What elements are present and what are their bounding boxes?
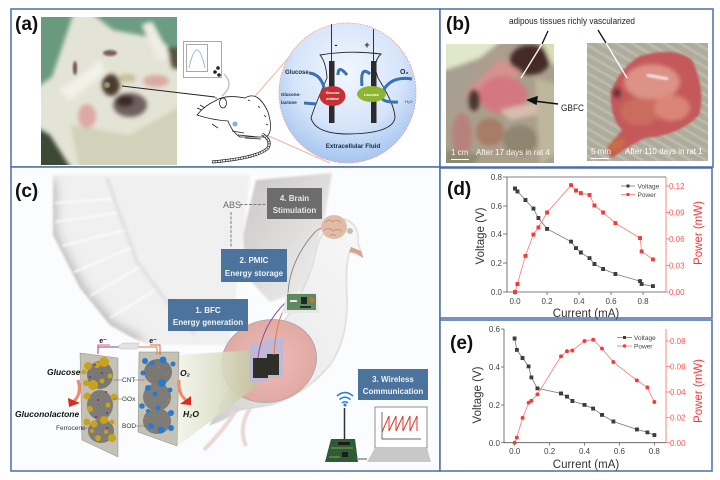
electrode callouts: Ferrocene — [56, 425, 86, 432]
label: glucose: Glucose — [47, 367, 81, 377]
label: 1 BFC: 1. BFC — [195, 306, 221, 315]
annotation: GBFC: GBFC — [561, 103, 584, 113]
chart: d: 0.0 — [491, 288, 503, 297]
pigeon eye — [347, 228, 353, 234]
chart: d: 0.8 — [637, 297, 649, 306]
arrow: GBFC — [528, 97, 558, 104]
icon: wifi router — [325, 392, 358, 462]
legend: Voltage — [638, 184, 660, 190]
GOx clusters — [82, 357, 118, 442]
chart: e: 0.0 — [489, 439, 501, 448]
chart: d: 0.4 — [573, 297, 585, 306]
diagram: extracellular fluid cell: Extracellular Fluid — [326, 143, 380, 150]
diagram: extracellular fluid cell: + — [364, 40, 370, 50]
icon: laptop with sawtooth signal — [358, 407, 431, 462]
axis titles: Voltage (V) — [472, 366, 484, 423]
flask outline — [311, 52, 395, 134]
chart: e: Power (mW) — [693, 359, 705, 423]
label: 4 brain stimulation — [267, 188, 322, 219]
chart: e: 0.0 — [509, 447, 521, 456]
pink implant pocket — [212, 309, 326, 413]
chart: d: 0.00 — [669, 288, 685, 297]
chart: e: 0.8 — [649, 447, 660, 456]
electron wires and connector box — [98, 343, 160, 355]
chart: e: 0.04 — [670, 388, 686, 397]
chart: e — [472, 325, 705, 471]
icon: oscilloscope — [184, 42, 229, 96]
BOD clusters — [139, 356, 176, 434]
chart: d: 0.8 — [491, 173, 503, 182]
enzyme: laccase: Laccase — [364, 93, 379, 97]
blue reaction arrows — [304, 70, 412, 104]
heading: d: (d) — [447, 179, 471, 200]
label: 3 wireless communication: 3. Wireless — [372, 375, 414, 384]
photo: tissue after 110 days — [587, 43, 708, 161]
chart: d: 0.2 — [541, 297, 553, 306]
chart: e: 0.00 — [670, 439, 686, 448]
label: electron left: e⁻ — [99, 338, 107, 345]
panel: d, voltage and power curves — [440, 168, 712, 320]
panel: b, explanted tissue photos — [440, 9, 713, 170]
electrode callouts — [56, 377, 148, 432]
label: 1 BFC — [168, 299, 248, 331]
annotation: adipous tissues: adipous tissues richly vascularized — [509, 16, 635, 26]
electrode callouts: BOD — [122, 423, 136, 430]
panel: b, explanted tissue photos: After 17 days in rat 4 — [476, 148, 550, 157]
photo: white rat with implant — [41, 17, 177, 165]
heading: e: (e) — [450, 333, 473, 354]
chart: d: Power (mW) — [693, 201, 705, 265]
enzyme: glucose oxidase: oxidase — [326, 97, 339, 101]
diagram: extracellular fluid cell: O₂ — [400, 69, 409, 76]
icon: rat line drawing — [197, 96, 271, 162]
chart: e: Current (mA) — [553, 459, 619, 471]
enzyme: glucose oxidase: Glucose — [326, 91, 339, 95]
chart: d: 0.09 — [669, 208, 685, 218]
icon: brain — [321, 215, 347, 239]
chart: d: 0.4 — [491, 230, 503, 239]
photo captions: 1 cm — [451, 148, 469, 157]
panel: b, explanted tissue photos: 5 mm — [591, 147, 611, 156]
chart: e: 0.4 — [489, 363, 501, 372]
series: power — [515, 185, 653, 292]
legend: Power — [638, 192, 657, 199]
ferrocene dots — [89, 364, 108, 429]
electrodes — [332, 24, 374, 61]
legend — [617, 335, 656, 350]
diagram: extracellular fluid cell: H₂O — [405, 99, 413, 104]
photo: tissue after 17 days — [446, 44, 554, 163]
diagram: extracellular fluid cell — [279, 23, 416, 163]
label: 4 brain stimulation: 4. Brain — [280, 194, 309, 203]
label: 4 brain stimulation: Stimulation — [273, 206, 316, 215]
panel: b, explanted tissue photos: After 110 days in rat 1 — [625, 147, 703, 156]
label: 2 PMIC — [221, 249, 287, 282]
heading: b: (b) — [446, 14, 470, 35]
red arrows — [68, 380, 191, 407]
electrode callouts: CNT — [122, 377, 135, 384]
ABS dashed connectors — [231, 204, 267, 248]
chart: e: 0.08 — [670, 337, 686, 346]
right electrode: oxygen cathode — [138, 352, 179, 446]
connector line from photo to rat — [122, 86, 215, 97]
chart: e: 0.02 — [670, 413, 686, 422]
electrode callouts: GOx — [122, 396, 136, 403]
left electrode: glucose anode — [80, 353, 118, 457]
implanted electrodes — [250, 338, 283, 382]
label: 2 PMIC: 2. PMIC — [240, 256, 269, 265]
icon: PCB — [282, 293, 320, 313]
label: O2: O₂ — [180, 368, 191, 378]
label: 1 BFC: Energy generation — [173, 318, 243, 327]
panel: e, voltage and power curves — [440, 320, 712, 471]
diagram: extracellular fluid cell: Glucono- — [281, 92, 301, 97]
illustration: large wing — [52, 174, 250, 345]
label: 2 PMIC: Energy storage — [225, 269, 284, 278]
chart: e: 0.4 — [579, 447, 591, 456]
axis titles: Voltage (V) — [475, 207, 487, 264]
chart: e: 0.06 — [670, 362, 686, 372]
label: 3 wireless communication — [358, 369, 428, 400]
series: voltage — [515, 188, 653, 286]
magnifier beam — [178, 350, 258, 446]
beak — [349, 247, 363, 258]
chart: d: 0.06 — [669, 235, 685, 244]
chart: d: Current (mA) — [553, 308, 619, 320]
chart: e: 0.2 — [544, 447, 556, 456]
pointer arrows — [542, 30, 606, 44]
heading: c: (c) — [15, 181, 38, 202]
chart: e: 0.6 — [614, 447, 626, 456]
chart: e: 0.6 — [489, 325, 501, 334]
enzyme: glucose oxidase — [320, 86, 346, 106]
chart: d: 0.6 — [605, 297, 617, 306]
panel: a, implanted rat and biofuel cell schematic — [11, 9, 440, 170]
legend: Voltage — [634, 335, 656, 342]
polarity signs: - — [334, 40, 338, 50]
illustration: pigeon body — [204, 219, 363, 450]
labels: Glucose — [285, 70, 309, 76]
label: gluconolactone: Gluconolactone — [15, 409, 80, 419]
illustration: far wing — [243, 173, 332, 302]
label: 3 wireless communication: Communication — [363, 387, 423, 396]
zoom guide lines — [243, 55, 330, 163]
chart: d: 0.12 — [669, 182, 685, 191]
diagram: extracellular fluid cell: lactone — [281, 100, 297, 105]
chart: d: 0.03 — [669, 262, 685, 270]
series: power — [515, 340, 654, 443]
wires — [258, 302, 286, 358]
legend: Power — [634, 344, 653, 350]
heading: a: (a) — [15, 14, 38, 35]
legend — [621, 184, 660, 199]
chart: d: 0.6 — [491, 202, 503, 211]
series: voltage — [515, 338, 654, 435]
panel: c, pigeon implanted system — [11, 167, 440, 471]
chart: d: 0.0 — [509, 297, 521, 306]
ABS label: ABS — [223, 200, 241, 210]
chart: e: 0.2 — [489, 401, 501, 410]
chart: d — [475, 173, 705, 320]
label: H2O: H₂O — [183, 409, 199, 419]
label: electron right: e⁻ — [149, 338, 157, 345]
chart: d: 0.2 — [491, 259, 503, 268]
